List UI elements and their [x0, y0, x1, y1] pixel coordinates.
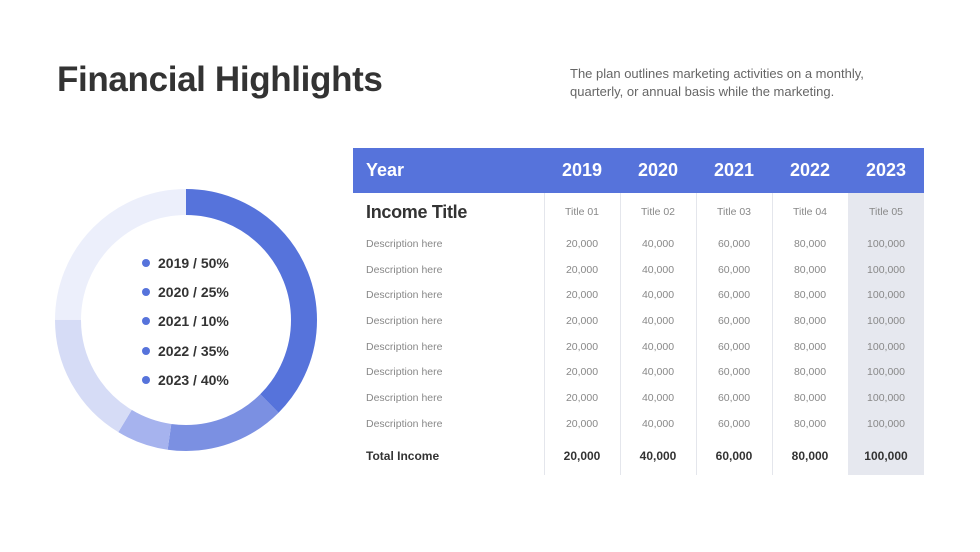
- table body: Description here: [366, 315, 442, 327]
- table body: 60,000: [718, 392, 750, 404]
- table body: 40,000: [642, 289, 674, 301]
- subtitle text: The plan outlines marketing activities on a monthly, quarterly, or annual basis while the marketing.: [570, 66, 864, 99]
- table body: Title 02: [641, 206, 675, 218]
- table body: 20,000: [566, 366, 598, 378]
- table body: 40,000: [642, 238, 674, 250]
- table body: Title 01: [565, 206, 599, 218]
- table body: Description here: [366, 392, 442, 404]
- table body: 100,000: [867, 289, 905, 301]
- table body: Description here: [366, 341, 442, 353]
- table body: 80,000: [792, 448, 828, 462]
- table body: 20,000: [566, 264, 598, 276]
- table body: 80,000: [794, 315, 826, 327]
- table body: 40,000: [642, 392, 674, 404]
- table body: Total Income: [366, 448, 439, 462]
- table body: 40,000: [642, 315, 674, 327]
- table body: 100,000: [867, 418, 905, 430]
- table body: 40,000: [640, 448, 676, 462]
- table body: 40,000: [642, 264, 674, 276]
- legend: 2021 / 10%: [158, 313, 229, 329]
- table body: 40,000: [642, 366, 674, 378]
- table body: 60,000: [718, 366, 750, 378]
- table body: 80,000: [794, 238, 826, 250]
- table body: 20,000: [564, 448, 600, 462]
- title: Financial Highlights: [57, 60, 383, 99]
- table body: 20,000: [566, 238, 598, 250]
- table body: 40,000: [642, 341, 674, 353]
- table body: 20,000: [566, 315, 598, 327]
- legend: 2022 / 35%: [158, 343, 229, 359]
- table body: 20,000: [566, 418, 598, 430]
- table body: 80,000: [794, 289, 826, 301]
- table body: 100,000: [867, 366, 905, 378]
- table body: Description here: [366, 264, 442, 276]
- column dividers: [544, 193, 545, 475]
- table body: 80,000: [794, 341, 826, 353]
- table body: Title 03: [717, 206, 751, 218]
- table body: 60,000: [718, 315, 750, 327]
- table body: 80,000: [794, 366, 826, 378]
- table body: 80,000: [794, 392, 826, 404]
- table body: 100,000: [867, 341, 905, 353]
- table header: [353, 148, 924, 193]
- table body: 60,000: [716, 448, 752, 462]
- table body: 60,000: [718, 264, 750, 276]
- table header: 2022: [790, 160, 830, 180]
- table header: 2019: [562, 160, 602, 180]
- table body: 80,000: [794, 418, 826, 430]
- table body: 100,000: [867, 238, 905, 250]
- table body: 60,000: [718, 418, 750, 430]
- table body: 20,000: [566, 392, 598, 404]
- table body: Title 04: [793, 206, 827, 218]
- table body: 100,000: [864, 448, 908, 462]
- table body: 60,000: [718, 238, 750, 250]
- table body: Title 05: [869, 206, 903, 218]
- table body: 60,000: [718, 341, 750, 353]
- table body: 100,000: [867, 315, 905, 327]
- table body: [366, 202, 908, 462]
- table body: Description here: [366, 418, 442, 430]
- table body: 60,000: [718, 289, 750, 301]
- highlighted column background: [848, 193, 924, 475]
- table body: Description here: [366, 289, 442, 301]
- donut chart: [55, 189, 317, 451]
- table body: Description here: [366, 366, 442, 378]
- table body: 100,000: [867, 392, 905, 404]
- table body: 100,000: [867, 264, 905, 276]
- legend: 2020 / 25%: [158, 284, 229, 300]
- table header: Year: [366, 160, 404, 180]
- table body: 40,000: [642, 418, 674, 430]
- table header: 2023: [866, 160, 906, 180]
- table: [353, 148, 924, 475]
- legend: 2023 / 40%: [158, 372, 229, 388]
- table body: Description here: [366, 238, 442, 250]
- table header: 2021: [714, 160, 754, 180]
- legend: [142, 255, 229, 388]
- table header: 2020: [638, 160, 678, 180]
- table body: 20,000: [566, 341, 598, 353]
- table body: 80,000: [794, 264, 826, 276]
- legend: 2019 / 50%: [158, 255, 229, 271]
- table body: 20,000: [566, 289, 598, 301]
- table body: Income Title: [366, 202, 467, 222]
